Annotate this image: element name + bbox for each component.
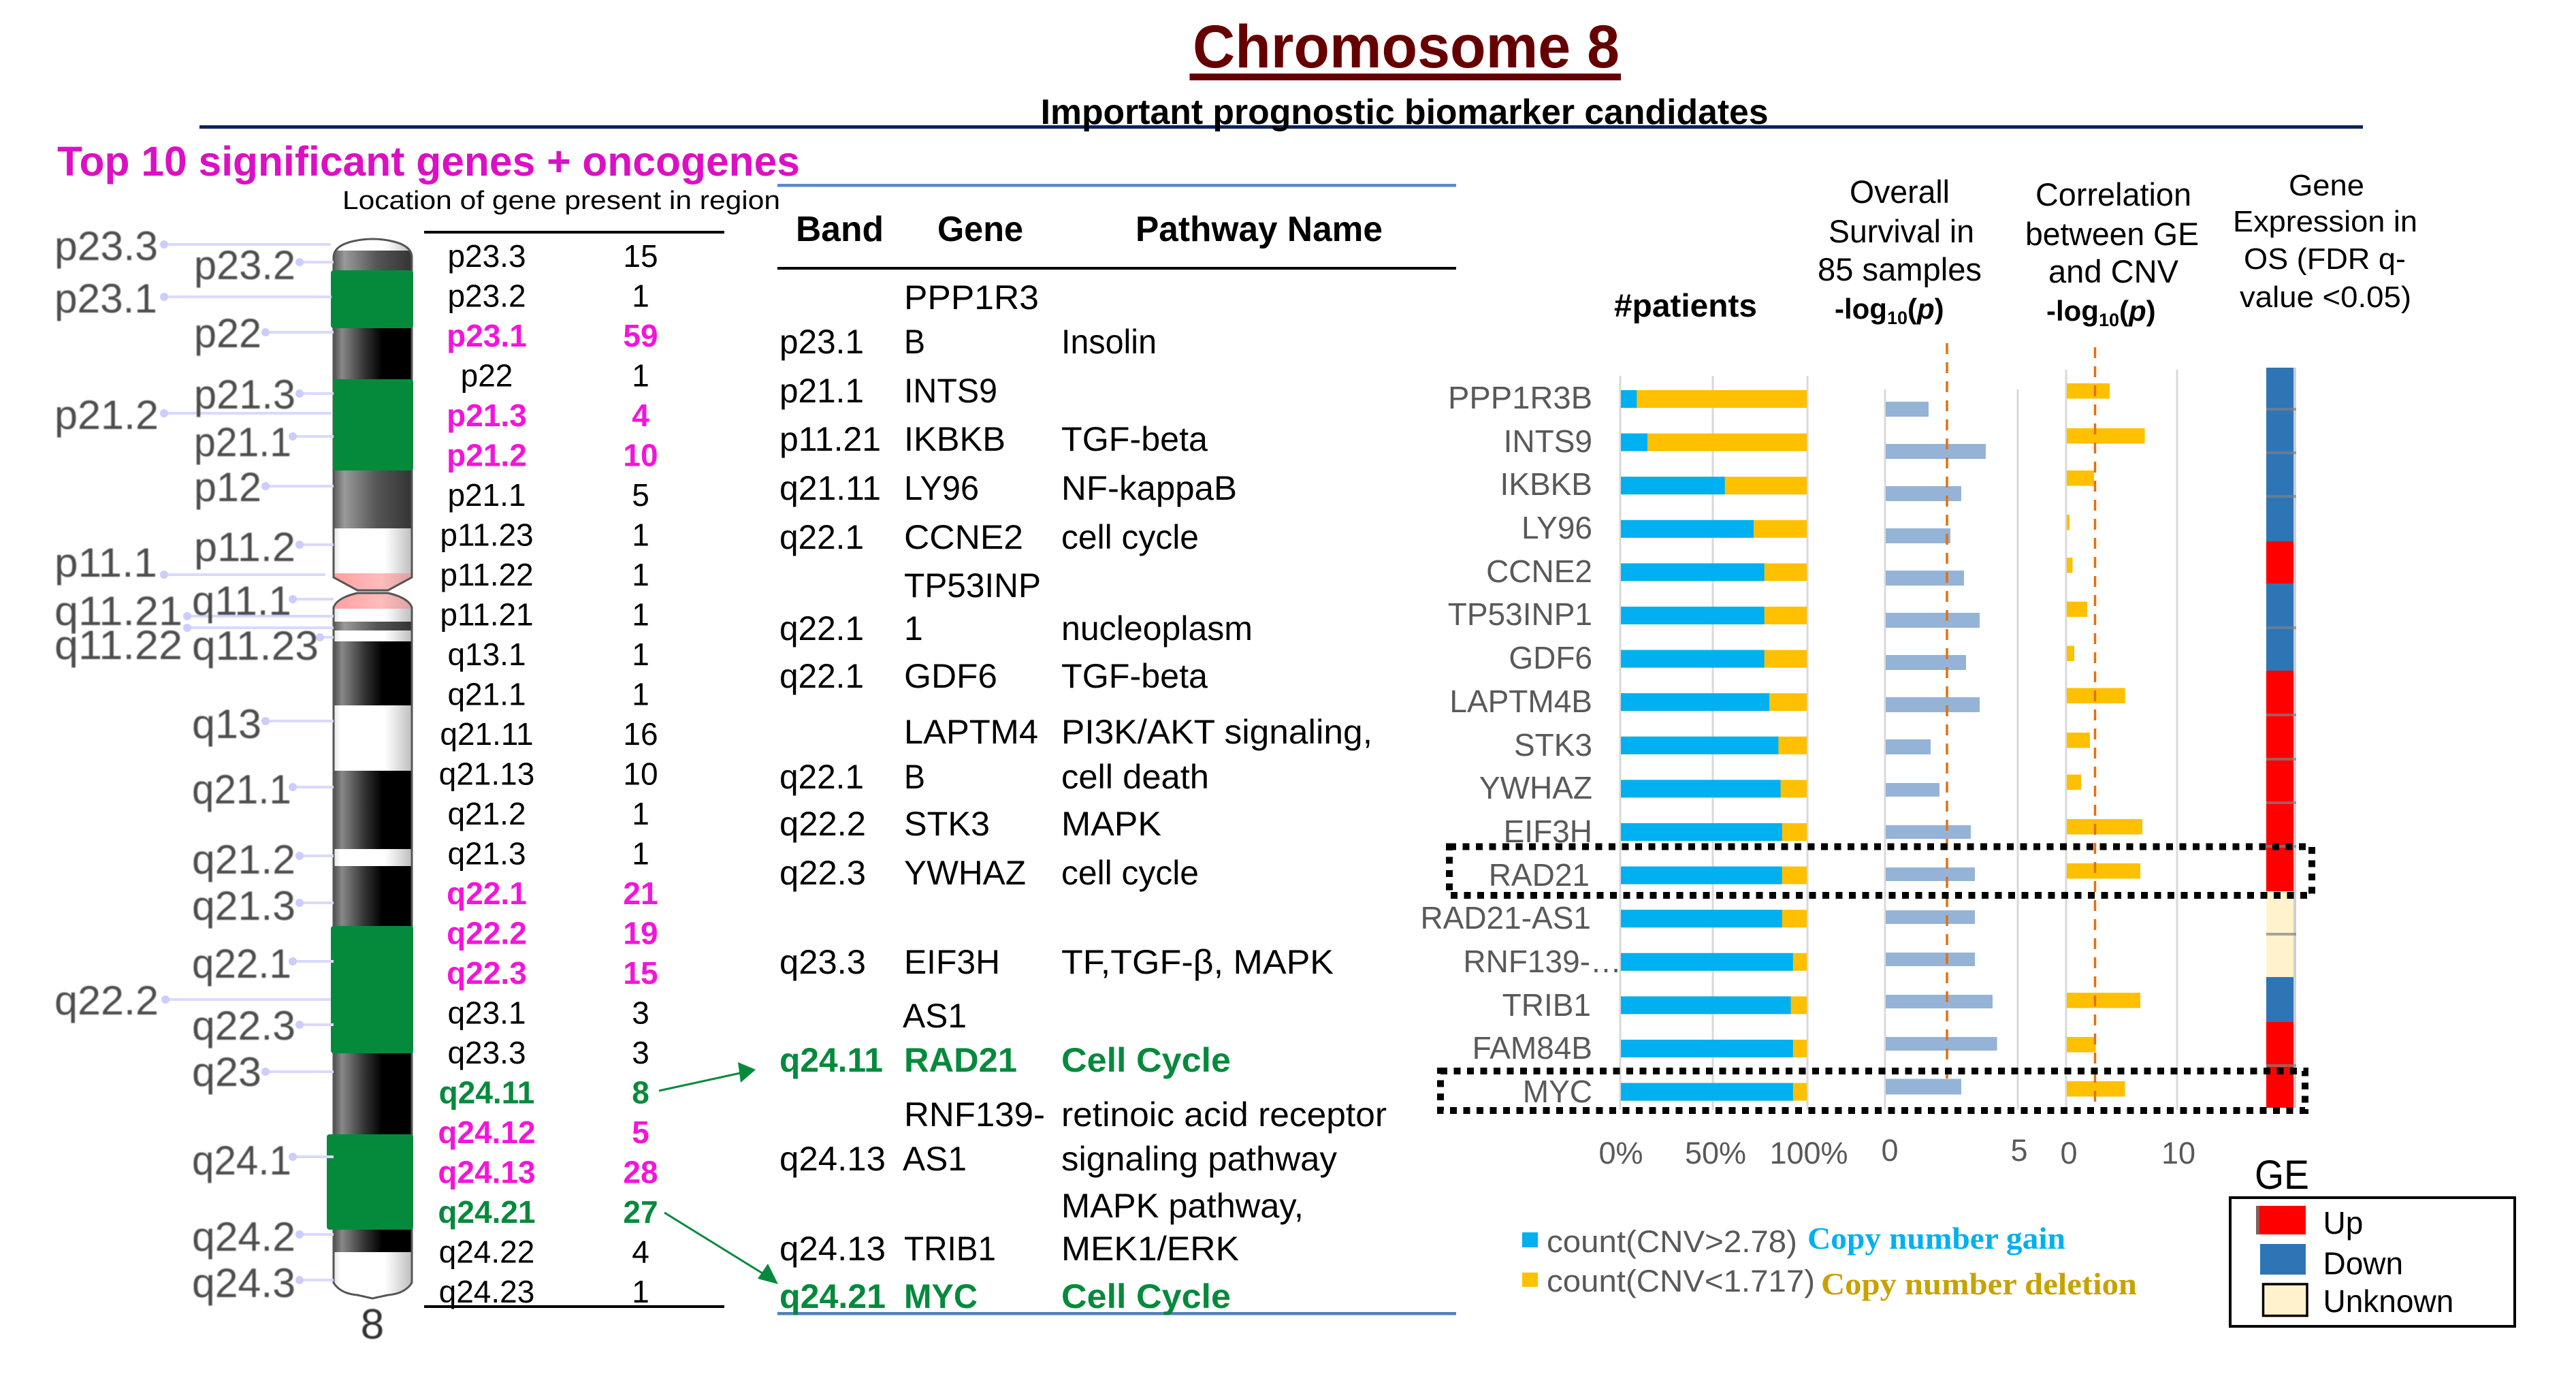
chromosome band labels with leader lines: q11.23 bbox=[192, 623, 319, 669]
table header: Band bbox=[796, 210, 884, 249]
chromosome band labels with leader lines: q24.1 bbox=[192, 1138, 291, 1183]
chromosome band labels with leader lines: p21.2 bbox=[54, 392, 159, 438]
column heading: gene expression: value <0.05) bbox=[2240, 281, 2411, 314]
left table: genes per region: q22.3 bbox=[447, 955, 527, 991]
left table: genes per region: q24.21 bbox=[438, 1194, 536, 1230]
left table: genes per region: q23.1 bbox=[447, 995, 526, 1031]
row: CCNE2: cell cycle bbox=[1061, 518, 1199, 556]
left table: genes per region: 59 bbox=[623, 318, 658, 353]
row: GDF6: q22.1 bbox=[779, 657, 864, 695]
left table: genes per region: p22 bbox=[461, 358, 513, 394]
chart gene labels: CCNE2 bbox=[1486, 554, 1592, 589]
left table: genes per region: 1 bbox=[632, 358, 649, 394]
chart gene labels: MYC bbox=[1523, 1074, 1592, 1109]
row: LAPTM4B: LAPTM4 bbox=[904, 713, 1038, 751]
left table: genes per region: 3 bbox=[632, 1035, 649, 1070]
row: PPP1R3B: Insolin bbox=[1061, 323, 1157, 361]
row: LAPTM4B: cell death bbox=[1061, 758, 1209, 796]
row: STK3 bbox=[779, 805, 1161, 843]
row: RNF139-AS1: RNF139- bbox=[904, 1096, 1045, 1134]
chart: #patients stacked bars bbox=[1620, 376, 1807, 1110]
chromosome band labels with leader lines: q24.3 bbox=[192, 1260, 295, 1306]
row: TP53INP1: TP53INP bbox=[904, 566, 1041, 605]
row: RAD21 highlighted: RAD21 bbox=[904, 1041, 1017, 1079]
row: INTS9: INTS9 bbox=[904, 372, 997, 410]
swatch: up bbox=[2256, 1206, 2306, 1234]
chromosome band labels with leader lines: q21.1 bbox=[192, 767, 291, 812]
left table: genes per region: p23.2 bbox=[447, 278, 526, 313]
column heading: correlation: ( bbox=[2119, 295, 2129, 327]
row: GDF6: GDF6 bbox=[904, 657, 997, 695]
left table: genes per region: q21.11 bbox=[440, 716, 534, 752]
row: MYC highlighted: q24.21 bbox=[779, 1277, 886, 1315]
row: RNF139-AS1 bbox=[779, 1096, 1387, 1178]
left table: genes per region: 16 bbox=[623, 716, 658, 752]
chart gene labels: RAD21-AS1 bbox=[1420, 900, 1591, 936]
chromosome band labels with leader lines: q11.22 bbox=[54, 622, 182, 668]
column heading: correlation: -log bbox=[2046, 295, 2099, 327]
row: PPP1R3B bbox=[779, 278, 1157, 361]
legend: copy number: count(CNV<1.717) bbox=[1547, 1264, 1815, 1298]
row: GDF6: TGF-beta bbox=[1061, 657, 1208, 695]
chromosome band labels with leader lines: p11.2 bbox=[194, 524, 295, 570]
caption: location of gene: Location of gene present in region bbox=[342, 187, 780, 215]
column heading: correlation: between GE bbox=[2025, 216, 2199, 252]
left table: genes per region: 10 bbox=[623, 756, 658, 791]
axis labels bbox=[1598, 1133, 2195, 1170]
row: INTS9: p21.1 bbox=[779, 372, 864, 410]
highlighted region: q24 bbox=[327, 1134, 413, 1230]
row: IKBKB: p11.21 bbox=[779, 420, 881, 458]
left table: genes per region: 8 bbox=[632, 1074, 649, 1110]
row: RNF139-AS1: AS1 bbox=[903, 1140, 967, 1178]
chromosome band labels with leader lines: q11.21 bbox=[54, 588, 182, 634]
left table: genes per region: p11.23 bbox=[440, 517, 534, 553]
chromosome band labels with leader lines: q13 bbox=[192, 701, 261, 747]
chromosome band labels with leader lines: q21.3 bbox=[192, 883, 295, 929]
axis labels: 100% bbox=[1769, 1136, 1848, 1170]
subtitle: Important prognostic biomarker candidates bbox=[1041, 93, 1769, 132]
gene fragment: AS1: AS1 bbox=[903, 997, 967, 1035]
row: STK3: q22.2 bbox=[779, 805, 866, 843]
row: YWHAZ: cell cycle bbox=[1061, 854, 1199, 892]
row: LY96: q21.11 bbox=[779, 469, 881, 507]
row: STK3: STK3 bbox=[904, 805, 990, 843]
left table: genes per region: 15 bbox=[623, 955, 658, 991]
left table: genes per region: p21.1 bbox=[447, 477, 526, 513]
left table: genes per region: q24.22 bbox=[439, 1234, 534, 1269]
left table: genes per region: 21 bbox=[623, 876, 658, 911]
row: YWHAZ: q22.3 bbox=[779, 854, 866, 892]
row: TRIB1: MAPK pathway, bbox=[1061, 1187, 1304, 1225]
column heading: correlation: Correlation bbox=[2035, 176, 2191, 212]
column heading: overall survival: -log bbox=[1835, 293, 1887, 325]
row: TRIB1: q24.13 bbox=[779, 1230, 886, 1268]
chart gene labels: FAM84B bbox=[1472, 1030, 1592, 1066]
chart gene labels: RAD21 bbox=[1489, 857, 1590, 893]
row: IKBKB: TGF-beta bbox=[1061, 420, 1208, 458]
column heading: overall survival: Survival in bbox=[1829, 213, 1974, 249]
legend: gene expression: GE bbox=[2255, 1152, 2309, 1198]
row: LAPTM4B: q22.1 bbox=[779, 758, 864, 796]
column heading: overall survival bbox=[1818, 174, 1982, 328]
chart gene labels: STK3 bbox=[1514, 727, 1592, 763]
left table: genes per region: q24.13 bbox=[438, 1155, 536, 1190]
left table: genes per region bbox=[424, 231, 724, 1309]
dotted highlight: RAD21 bbox=[1449, 847, 2312, 895]
row: TP53INP1 bbox=[779, 566, 1253, 648]
row: TRIB1 bbox=[779, 1187, 1304, 1268]
left table: genes per region: q22.1 bbox=[447, 876, 527, 911]
threshold line: correlation bbox=[2094, 347, 2096, 1102]
row: TRIB1: TRIB1 bbox=[904, 1230, 996, 1268]
column heading: correlation bbox=[2025, 176, 2199, 330]
row: TP53INP1: q22.1 bbox=[779, 609, 864, 648]
left table: genes per region: q22.2 bbox=[447, 915, 527, 950]
left table: genes per region: 10 bbox=[623, 437, 658, 473]
axis labels: 50% bbox=[1685, 1136, 1746, 1170]
row: CCNE2 bbox=[779, 518, 1199, 556]
row: TP53INP1: nucleoplasm bbox=[1061, 609, 1253, 648]
chart gene labels: TRIB1 bbox=[1502, 987, 1591, 1023]
arrow: q24.11 to RAD21 bbox=[659, 1062, 756, 1091]
row: EIF3H bbox=[779, 943, 1334, 981]
column heading: overall survival: Overall bbox=[1850, 174, 1950, 210]
title: Chromosome 8 bbox=[1193, 12, 1620, 80]
row: RAD21 highlighted bbox=[779, 1041, 1231, 1079]
dotted highlight: MYC bbox=[1440, 1071, 2305, 1111]
left table: genes per region: 3 bbox=[632, 995, 649, 1031]
row: EIF3H: q23.3 bbox=[779, 943, 866, 981]
left table: genes per region: q24.12 bbox=[438, 1115, 536, 1150]
left table: genes per region: q13.1 bbox=[447, 637, 526, 672]
row: IKBKB bbox=[779, 420, 1208, 458]
left table: genes per region: 1 bbox=[632, 517, 649, 553]
row: EIF3H: TF,TGF-β, MAPK bbox=[1061, 943, 1334, 981]
threshold line: survival bbox=[1946, 343, 1948, 1082]
left table: genes per region: 4 bbox=[632, 398, 649, 433]
chart gene labels bbox=[1420, 380, 1622, 1109]
left table: genes per region: q21.2 bbox=[447, 796, 526, 831]
chromosome band labels with leader lines: p23.1 bbox=[54, 276, 157, 321]
left table: genes per region: p11.21 bbox=[440, 596, 534, 632]
chart gene labels: EIF3H bbox=[1504, 814, 1592, 849]
left table: genes per region: p23.3 bbox=[447, 238, 526, 274]
chromosome band labels with leader lines: q21.2 bbox=[192, 837, 295, 882]
chromosome band labels with leader lines bbox=[54, 223, 384, 1348]
left table: genes per region: q24.23 bbox=[439, 1274, 534, 1309]
left table: genes per region: 5 bbox=[632, 1115, 649, 1150]
table header: Pathway Name bbox=[1136, 210, 1383, 249]
row: RNF139-AS1: q24.13 bbox=[779, 1140, 886, 1178]
row: LAPTM4B bbox=[779, 713, 1372, 796]
chromosome band labels with leader lines: p23.2 bbox=[194, 242, 295, 288]
left table: genes per region: 1 bbox=[632, 557, 649, 592]
row: TRIB1: MEK1/ERK bbox=[1061, 1230, 1239, 1268]
row: LAPTM4B: B bbox=[904, 758, 925, 796]
chart gene labels: LAPTM4B bbox=[1449, 684, 1592, 719]
left table: genes per region: 28 bbox=[623, 1155, 658, 1190]
arrow: q24.21 to MYC bbox=[664, 1213, 778, 1284]
chart: GE-CNV correlation bars bbox=[2066, 370, 2177, 1110]
row: LY96: NF-kappaB bbox=[1061, 469, 1237, 507]
row: YWHAZ bbox=[779, 854, 1199, 892]
chart gene labels: PPP1R3B bbox=[1448, 380, 1592, 415]
row: MYC highlighted bbox=[779, 1277, 1231, 1315]
row: RAD21 highlighted: Cell Cycle bbox=[1061, 1041, 1231, 1079]
left table: genes per region: q23.3 bbox=[447, 1035, 526, 1070]
chart gene labels: GDF6 bbox=[1509, 640, 1592, 675]
column heading: correlation: p) bbox=[2129, 295, 2156, 327]
highlighted region: p23 bbox=[331, 270, 413, 328]
center table: band, gene, pathway bbox=[777, 184, 1456, 1315]
left table: genes per region: 1 bbox=[632, 836, 649, 872]
left table: genes per region: p21.2 bbox=[447, 437, 527, 473]
column heading: overall survival: 10 bbox=[1887, 308, 1907, 328]
row: LY96: LY96 bbox=[904, 469, 979, 507]
left table: genes per region: 1 bbox=[632, 1274, 649, 1309]
gene expression status strip bbox=[2266, 368, 2296, 1108]
chart gene labels: LY96 bbox=[1522, 510, 1592, 545]
chart gene labels: IKBKB bbox=[1500, 466, 1592, 502]
left table: genes per region: 1 bbox=[632, 637, 649, 672]
column heading: correlation: and CNV bbox=[2048, 253, 2179, 289]
chart gene labels: RNF139-… bbox=[1463, 944, 1622, 979]
highlighted region: q22 bbox=[331, 926, 413, 1053]
left table: genes per region: 1 bbox=[632, 677, 649, 712]
legend: gene expression: Unknown bbox=[2323, 1283, 2453, 1319]
swatch: CNV gain bbox=[1522, 1232, 1538, 1247]
table header bbox=[796, 210, 1383, 249]
swatch: unknown bbox=[2263, 1284, 2307, 1315]
row: CCNE2: CCNE2 bbox=[904, 518, 1023, 556]
column heading: gene expression bbox=[2233, 169, 2417, 314]
left table: genes per region: q21.13 bbox=[439, 756, 534, 791]
chromosome band labels with leader lines: p11.1 bbox=[54, 540, 157, 586]
column heading: gene expression: Expression in bbox=[2233, 205, 2417, 238]
chart gene labels: INTS9 bbox=[1504, 424, 1592, 459]
row: RAD21 highlighted: q24.11 bbox=[779, 1041, 883, 1079]
chart: overall survival bars bbox=[1885, 389, 2018, 1110]
left table: genes per region: p23.1 bbox=[447, 318, 527, 353]
row: RNF139-AS1: retinoic acid receptor bbox=[1061, 1096, 1387, 1134]
axis labels: 0 bbox=[2060, 1136, 2078, 1170]
left table: genes per region: q24.11 bbox=[439, 1074, 534, 1110]
axis labels: 10 bbox=[2161, 1136, 2195, 1170]
chromosome band labels with leader lines: p21.3 bbox=[194, 372, 295, 417]
chromosome band labels with leader lines: p21.1 bbox=[194, 419, 291, 465]
left table: genes per region: 1 bbox=[632, 278, 649, 313]
heading: top 10 significant genes: Top 10 significant genes + oncogenes bbox=[57, 138, 800, 185]
legend: copy number bbox=[1522, 1221, 2137, 1301]
swatch: down bbox=[2260, 1244, 2306, 1275]
chromosome band labels with leader lines: 8 bbox=[361, 1301, 384, 1348]
axis labels: 0 bbox=[1881, 1133, 1899, 1168]
chromosome band labels with leader lines: q22.1 bbox=[192, 941, 291, 987]
row: LY96 bbox=[779, 469, 1237, 507]
legend: gene expression: Down bbox=[2323, 1246, 2403, 1281]
chart gene labels: TP53INP1 bbox=[1448, 596, 1592, 632]
row: PPP1R3B: B bbox=[904, 323, 925, 361]
row: MYC highlighted: Cell Cycle bbox=[1061, 1277, 1231, 1315]
legend: gene expression: Up bbox=[2323, 1205, 2363, 1241]
table header: Gene bbox=[937, 210, 1023, 249]
row: INTS9 bbox=[779, 372, 997, 410]
column heading: gene expression: OS (FDR q- bbox=[2244, 242, 2406, 276]
chromosome band labels with leader lines: p22 bbox=[194, 310, 261, 356]
chromosome band labels with leader lines: p23.3 bbox=[54, 223, 158, 269]
row: YWHAZ: YWHAZ bbox=[904, 854, 1026, 892]
row: EIF3H: EIF3H bbox=[904, 943, 1000, 981]
column heading: correlation: 10 bbox=[2099, 310, 2119, 330]
left table: genes per region: p21.3 bbox=[447, 398, 527, 433]
legend: copy number: count(CNV>2.78) bbox=[1547, 1224, 1797, 1259]
row: GDF6 bbox=[779, 657, 1208, 695]
swatch: CNV deletion bbox=[1522, 1273, 1538, 1287]
left table: genes per region: q21.1 bbox=[447, 677, 526, 712]
row: MYC highlighted: MYC bbox=[904, 1277, 978, 1315]
row: IKBKB: IKBKB bbox=[904, 420, 1005, 458]
row: LAPTM4B: PI3K/AKT signaling, bbox=[1061, 713, 1372, 751]
row: PPP1R3B: PPP1R3 bbox=[904, 278, 1039, 317]
chromosome band labels with leader lines: p12 bbox=[194, 464, 261, 510]
legend: copy number: Copy number deletion bbox=[1821, 1266, 2137, 1301]
column heading: gene expression: Gene bbox=[2289, 169, 2364, 202]
legend: gene expression bbox=[2230, 1152, 2515, 1326]
chromosome band labels with leader lines: q22.3 bbox=[192, 1003, 295, 1049]
highlighted region: p21 bbox=[333, 379, 413, 470]
left table: genes per region: q21.3 bbox=[447, 836, 526, 872]
column heading: #patients: #patients bbox=[1614, 287, 1757, 323]
left table: genes per region: 27 bbox=[623, 1194, 658, 1230]
left table: genes per region: 4 bbox=[632, 1234, 649, 1269]
column heading: overall survival: 85 samples bbox=[1818, 251, 1982, 287]
left table: genes per region: p11.22 bbox=[440, 557, 534, 592]
left table: genes per region: 1 bbox=[632, 796, 649, 831]
axis labels: 0% bbox=[1598, 1136, 1643, 1170]
chromosome 8 ideogram bbox=[327, 237, 413, 1300]
chromosome band labels with leader lines: q24.2 bbox=[192, 1214, 295, 1260]
row: CCNE2: q22.1 bbox=[779, 518, 864, 556]
row: TP53INP1: 1 bbox=[904, 609, 923, 648]
chromosome band labels with leader lines: q22.2 bbox=[54, 978, 159, 1023]
left table: genes per region: 15 bbox=[623, 238, 658, 274]
chromosome band labels with leader lines: q11.1 bbox=[192, 578, 291, 624]
column heading: overall survival: p) bbox=[1917, 293, 1944, 325]
left table: genes per region: 19 bbox=[623, 915, 658, 950]
row: RNF139-AS1: signaling pathway bbox=[1061, 1140, 1337, 1178]
chart gene labels: YWHAZ bbox=[1479, 770, 1592, 805]
chromosome band labels with leader lines: q23 bbox=[192, 1049, 261, 1095]
left table: genes per region: 1 bbox=[632, 596, 649, 632]
legend: copy number: Copy number gain bbox=[1807, 1221, 2065, 1256]
column heading: overall survival: ( bbox=[1907, 293, 1917, 325]
row: PPP1R3B: p23.1 bbox=[779, 323, 864, 361]
axis labels: 5 bbox=[2010, 1133, 2028, 1168]
left table: genes per region: 5 bbox=[632, 477, 649, 513]
row: STK3: MAPK bbox=[1061, 805, 1161, 843]
